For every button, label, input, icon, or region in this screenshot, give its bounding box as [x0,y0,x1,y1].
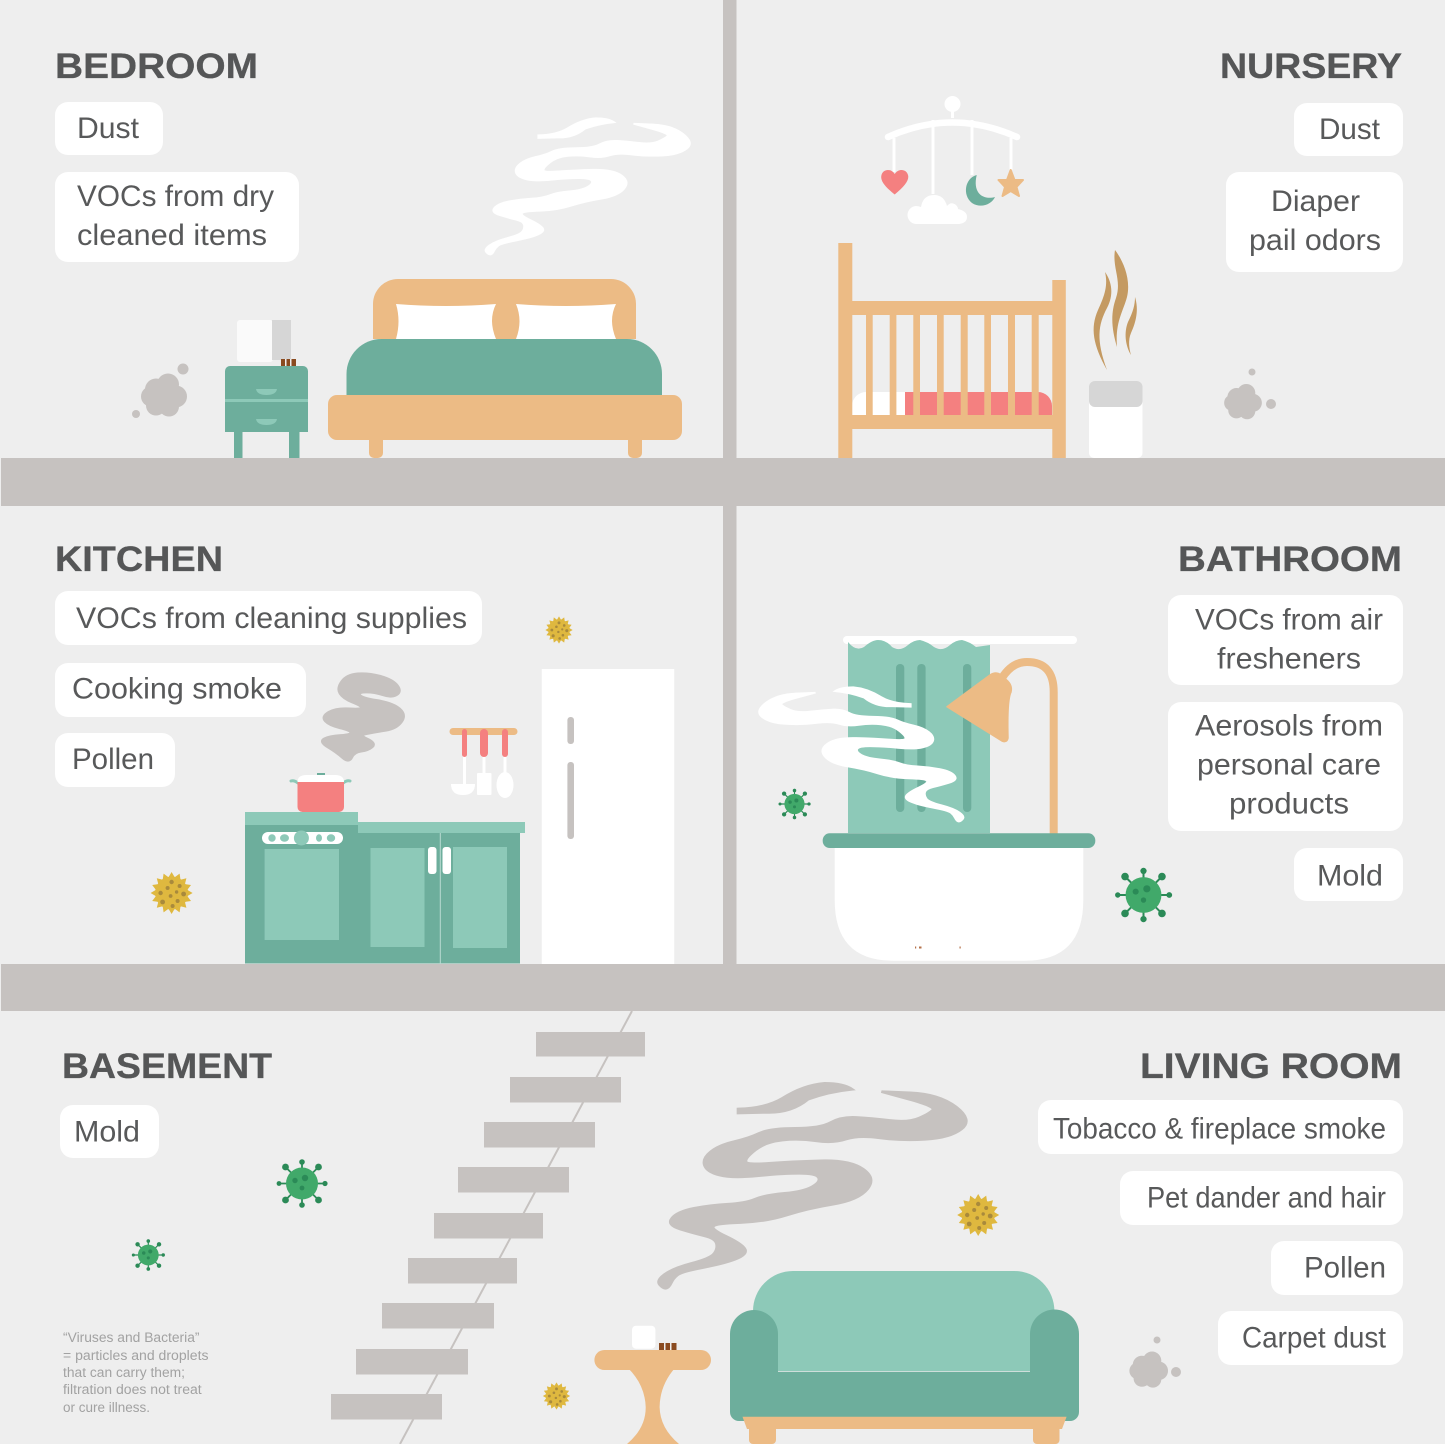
label: pollen: Pollen [72,743,154,776]
heading: kitchen: KITCHEN [55,540,223,579]
icon: pollen [957,1194,999,1236]
heading: nursery: NURSERY [1220,47,1402,86]
icon: pollen [545,616,573,644]
label: VOCs from air fresheners: VOCs from air [1195,604,1383,636]
bed [328,279,682,458]
label: dust [55,102,163,155]
refrigerator [542,669,674,964]
icon: virus [277,1159,328,1208]
label: VOCs from dry cleaned items: VOCs from dry [77,180,274,213]
icon: virus [1115,868,1172,922]
label: tobacco and fireplace smoke: Tobacco & fireplace smoke [1053,1112,1386,1146]
staircase [331,1011,645,1444]
label: carpet dust [1218,1311,1403,1365]
heading: bathroom: BATHROOM [1178,540,1402,579]
panel: bathroom [759,540,1403,961]
nightstand with lamp [225,320,308,458]
panel: basement [60,1011,645,1444]
icon: tobacco smoke [659,1083,966,1288]
footnote: filtration does not treat [63,1382,202,1397]
label: VOCs from cleaning supplies: VOCs from cleaning supplies [76,602,467,635]
label: carpet dust: Carpet dust [1242,1322,1387,1354]
label: pollen [55,733,175,787]
icon: cooking pot [291,773,350,812]
label: pet dander and hair: Pet dander and hair [1147,1182,1386,1214]
sofa [730,1271,1079,1444]
label: diaper pail odors: pail odors [1249,224,1381,257]
icon: diaper pail with odor [1089,250,1142,458]
icon: virus [778,789,811,819]
icon: pollen [543,1382,570,1410]
heading: basement: BASEMENT [62,1047,272,1086]
label: VOCs from air fresheners [1168,595,1403,685]
label: aerosols from personal care products: personal care [1197,748,1381,782]
icon: white smoke [486,118,690,255]
label: mold [60,1105,159,1158]
icon: dust cloud [1129,1336,1181,1388]
footnote: or cure illness. [63,1400,150,1415]
label: mold [1294,848,1403,901]
house structure: walls and floors [1,0,1445,1011]
bathtub [823,833,1095,961]
label: aerosols from personal care products: products [1229,788,1349,820]
footnote: that can carry them; [63,1365,185,1380]
label: VOCs from dry cleaned items [55,172,299,262]
shower head and pipe [947,662,1054,834]
label: diaper pail odors [1226,172,1403,272]
panel: bedroom [55,47,690,458]
label: mold: Mold [1317,860,1383,892]
crib [838,243,1066,458]
heading: living room: LIVING ROOM [1140,1047,1402,1086]
panel: kitchen [55,540,674,964]
icon: hanging utensils [450,728,518,798]
icon: dust cloud [1224,368,1276,419]
label: aerosols from personal care products [1168,702,1403,831]
label: pollen: Pollen [1304,1252,1386,1284]
label: cooking smoke: Cooking smoke [72,672,282,706]
label: dust: Dust [77,112,140,145]
kitchen cabinets and oven [245,812,525,964]
label: cooking smoke [55,663,306,717]
label: pollen [1271,1241,1403,1295]
icon: cooking smoke [323,674,403,760]
label: tobacco and fireplace smoke [1038,1100,1403,1154]
label: aerosols from personal care products: Aerosols from [1195,710,1383,742]
label: VOCs from cleaning supplies [55,591,482,645]
panel: living room [543,1047,1403,1444]
label: dust: Dust [1319,113,1381,146]
footnote [63,1330,209,1415]
icon: pollen [151,872,193,914]
icon: dust cloud [132,364,188,418]
label: pet dander and hair [1120,1171,1403,1225]
label: VOCs from dry cleaned items: cleaned items [77,219,267,252]
footnote: = particles and droplets [63,1348,209,1363]
heading: bedroom: BEDROOM [55,47,258,86]
side table with candle [594,1326,711,1444]
panel: nursery [838,47,1403,458]
icon: steam [759,687,963,822]
label: dust [1294,103,1403,156]
label: diaper pail odors: Diaper [1271,185,1360,218]
shower curtain [843,636,1077,833]
footnote: “Viruses and Bacteria” [63,1330,199,1345]
label: VOCs from air fresheners: fresheners [1217,642,1361,676]
icon: baby mobile [881,96,1023,224]
icon: virus [132,1239,165,1271]
label: mold: Mold [74,1116,140,1148]
